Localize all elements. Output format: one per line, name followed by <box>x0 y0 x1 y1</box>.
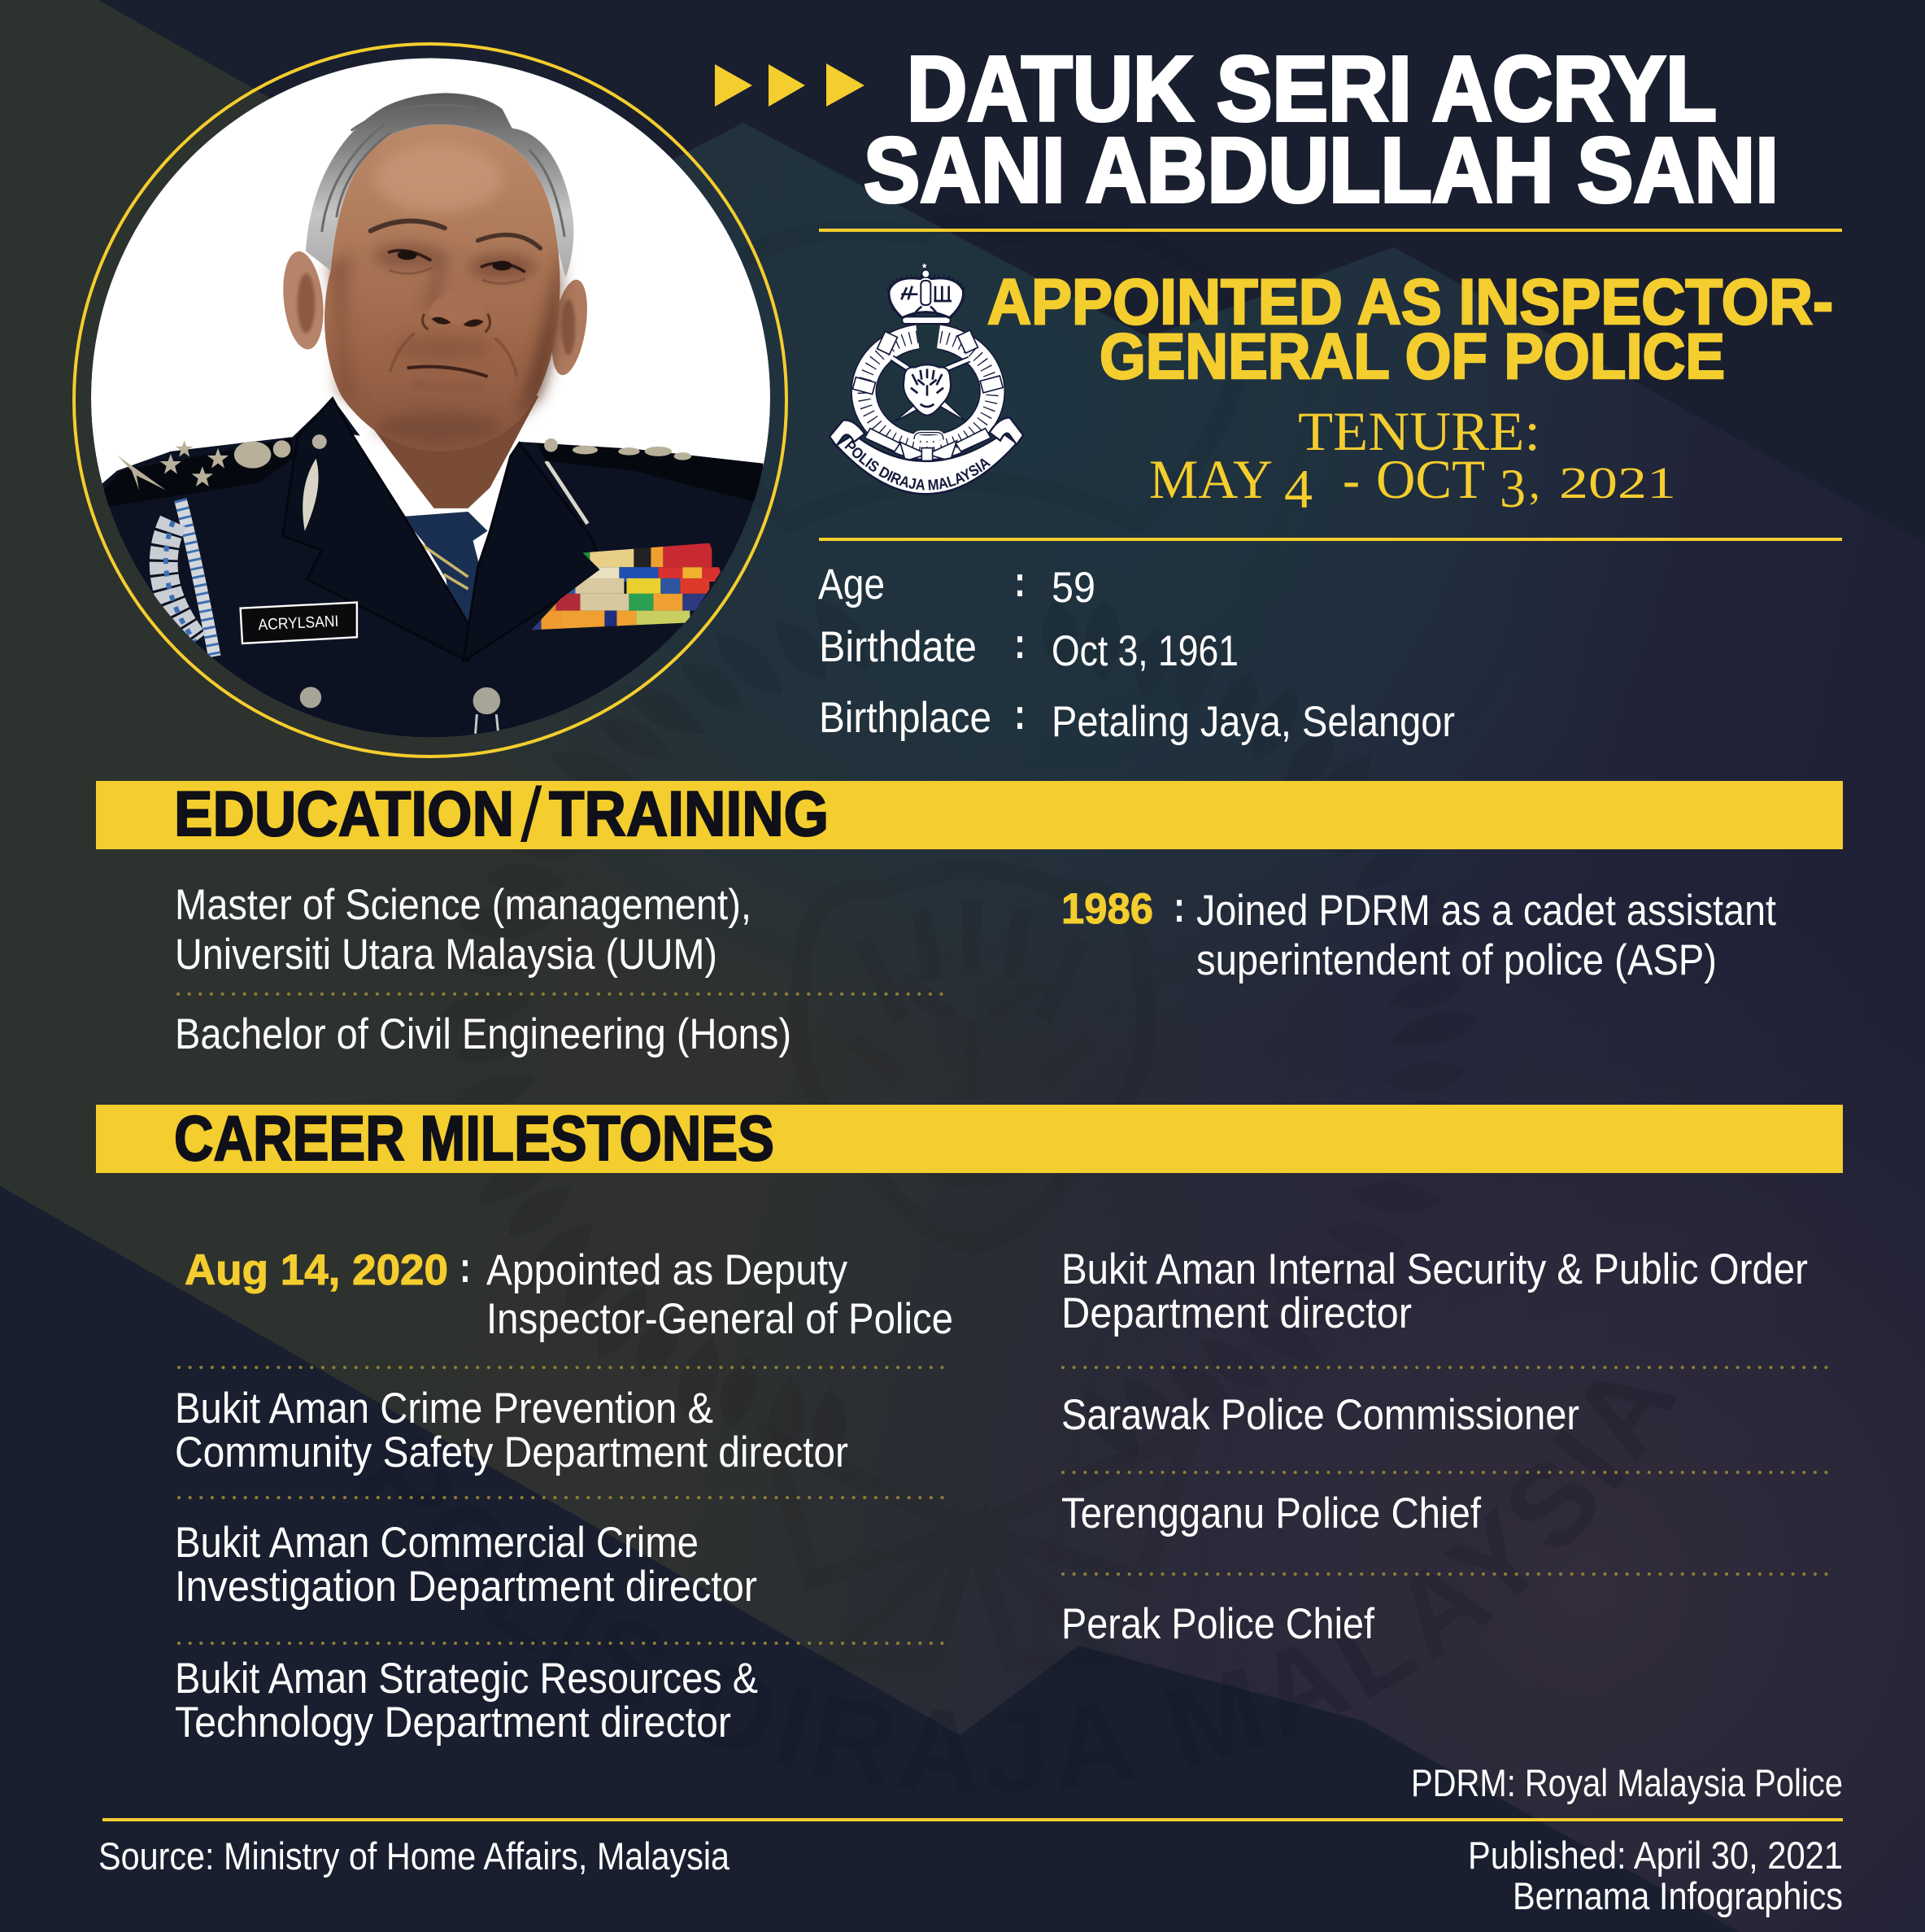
milestone: commercial crime: Investigation Department director <box>175 1563 757 1611</box>
publication credit: Bernama Infographics <box>1513 1874 1843 1917</box>
milestone: commercial crime <box>175 1519 757 1611</box>
panel: career milestones <box>96 1102 1843 1747</box>
title <box>864 37 1779 221</box>
medal ribbons <box>527 541 721 632</box>
milestone: deputy IGP: Appointed as Deputy <box>486 1246 847 1294</box>
milestone: strategic resources: Bukit Aman Strategic Resources & <box>175 1655 758 1703</box>
appointment heading <box>987 265 1833 392</box>
heading: education: TRAINING <box>549 778 829 849</box>
personal details: : <box>1014 558 1026 606</box>
tenure: 4 <box>1284 458 1313 520</box>
icon: police crest: POLIS DIRAJA MALAYSIA <box>844 440 991 491</box>
title: SANI ABDULLAH SANI <box>864 119 1779 221</box>
milestone: commercial crime: Bukit Aman Commercial Crime <box>175 1519 699 1567</box>
milestone: internal security: Bukit Aman Internal Security & Public Order <box>1061 1245 1808 1293</box>
portrait ring <box>74 44 786 757</box>
source credit: Source: Ministry of Home Affairs, Malaysia <box>98 1834 730 1877</box>
panel: education and training <box>96 772 1843 1058</box>
milestone: internal security: Department director <box>1061 1289 1412 1337</box>
heading: career: CAREER MILESTONES <box>174 1102 774 1174</box>
lanyard <box>163 499 215 656</box>
tie <box>403 512 488 626</box>
masters degree <box>175 881 751 979</box>
tenure: OCT <box>1376 448 1485 510</box>
personal details: : <box>1014 620 1026 668</box>
shirt <box>352 434 517 589</box>
milestone: deputy IGP: : <box>459 1244 471 1292</box>
milestone: terengganu: Terengganu Police Chief <box>1061 1489 1481 1537</box>
personal details: Petaling Jaya, Selangor <box>1052 698 1455 746</box>
milestone: crime prevention <box>175 1385 848 1476</box>
tenure: 3 <box>1500 457 1526 519</box>
bachelor degree: Bachelor of Civil Engineering (Hons) <box>175 1010 791 1058</box>
ears <box>279 250 593 377</box>
lower gold rule <box>819 538 1842 541</box>
1986 entry: superintendent of police (ASP) <box>1196 936 1717 984</box>
footer gold rule <box>102 1818 1843 1821</box>
portrait photo <box>88 59 775 748</box>
1986 entry: 1986 <box>1061 885 1153 933</box>
nose <box>390 290 517 377</box>
tenure: , <box>1529 458 1540 508</box>
mouth <box>407 367 488 389</box>
personal details <box>818 558 1455 746</box>
milestone: deputy IGP: Aug 14, 2020 <box>185 1246 448 1294</box>
personal details: 59 <box>1052 564 1095 612</box>
personal details: : <box>1014 691 1026 739</box>
personal details: Oct 3, 1961 <box>1052 627 1239 675</box>
face shading <box>327 145 561 443</box>
watermark lettering: POLIS DIRAJA MALAYSIA <box>333 1339 1701 1818</box>
personal details: Age <box>818 560 885 608</box>
1986 entry: Joined PDRM as a cadet assistant <box>1196 887 1776 935</box>
tenure: - <box>1343 448 1360 510</box>
milestone: crime prevention: Bukit Aman Crime Prevention & <box>175 1385 713 1433</box>
icon: police crest <box>828 261 1025 495</box>
masters degree: Universiti Utara Malaysia (UUM) <box>175 931 717 979</box>
milestone: deputy IGP: Inspector-General of Police <box>486 1295 953 1343</box>
abbreviation note: PDRM: Royal Malaysia Police <box>1411 1761 1843 1804</box>
milestone: strategic resources <box>175 1655 758 1747</box>
collar tabs <box>303 434 587 531</box>
watermark: police crest <box>438 219 1482 1660</box>
milestone: crime prevention: Community Safety Department director <box>175 1428 848 1476</box>
masters degree: Master of Science (management), <box>175 881 751 929</box>
tenure: TENURE: <box>1298 400 1540 462</box>
buttons <box>300 687 500 734</box>
1986 entry <box>1061 883 1776 984</box>
appointment heading: GENERAL OF POLICE <box>1100 320 1725 392</box>
hair <box>306 94 573 277</box>
publication credit <box>1468 1834 1843 1917</box>
1986 entry: : <box>1174 883 1185 931</box>
name tag: ACRYLSANI <box>258 613 339 634</box>
name tag <box>241 603 357 643</box>
heading bar: career <box>96 1105 1843 1173</box>
tenure: 2021 <box>1559 458 1676 508</box>
face <box>324 124 560 451</box>
appointment heading: APPOINTED AS INSPECTOR- <box>987 265 1833 338</box>
heading bar: education <box>96 781 1843 849</box>
upper gold rule <box>819 229 1842 232</box>
title: DATUK SERI ACRYL <box>907 37 1717 140</box>
publication credit: Published: April 30, 2021 <box>1468 1834 1843 1877</box>
milestone: deputy IGP <box>185 1244 953 1343</box>
milestone: internal security <box>1061 1245 1808 1337</box>
eyes and brows <box>371 221 540 284</box>
heading: education: EDUCATION <box>174 778 514 849</box>
epaulettes <box>103 438 763 507</box>
milestone: sarawak: Sarawak Police Commissioner <box>1061 1391 1579 1439</box>
heading: education: / <box>520 772 542 858</box>
tenure: MAY <box>1149 448 1273 510</box>
heading: education <box>174 772 829 858</box>
personal details: Birthplace <box>819 694 991 742</box>
milestone: strategic resources: Technology Department director <box>175 1699 731 1747</box>
personal details: Birthdate <box>819 623 977 671</box>
title arrows <box>715 63 865 107</box>
lapels <box>283 399 604 661</box>
tenure <box>1149 400 1676 520</box>
milestone: perak: Perak Police Chief <box>1061 1600 1374 1648</box>
neck <box>356 396 538 508</box>
uniform <box>88 399 775 748</box>
